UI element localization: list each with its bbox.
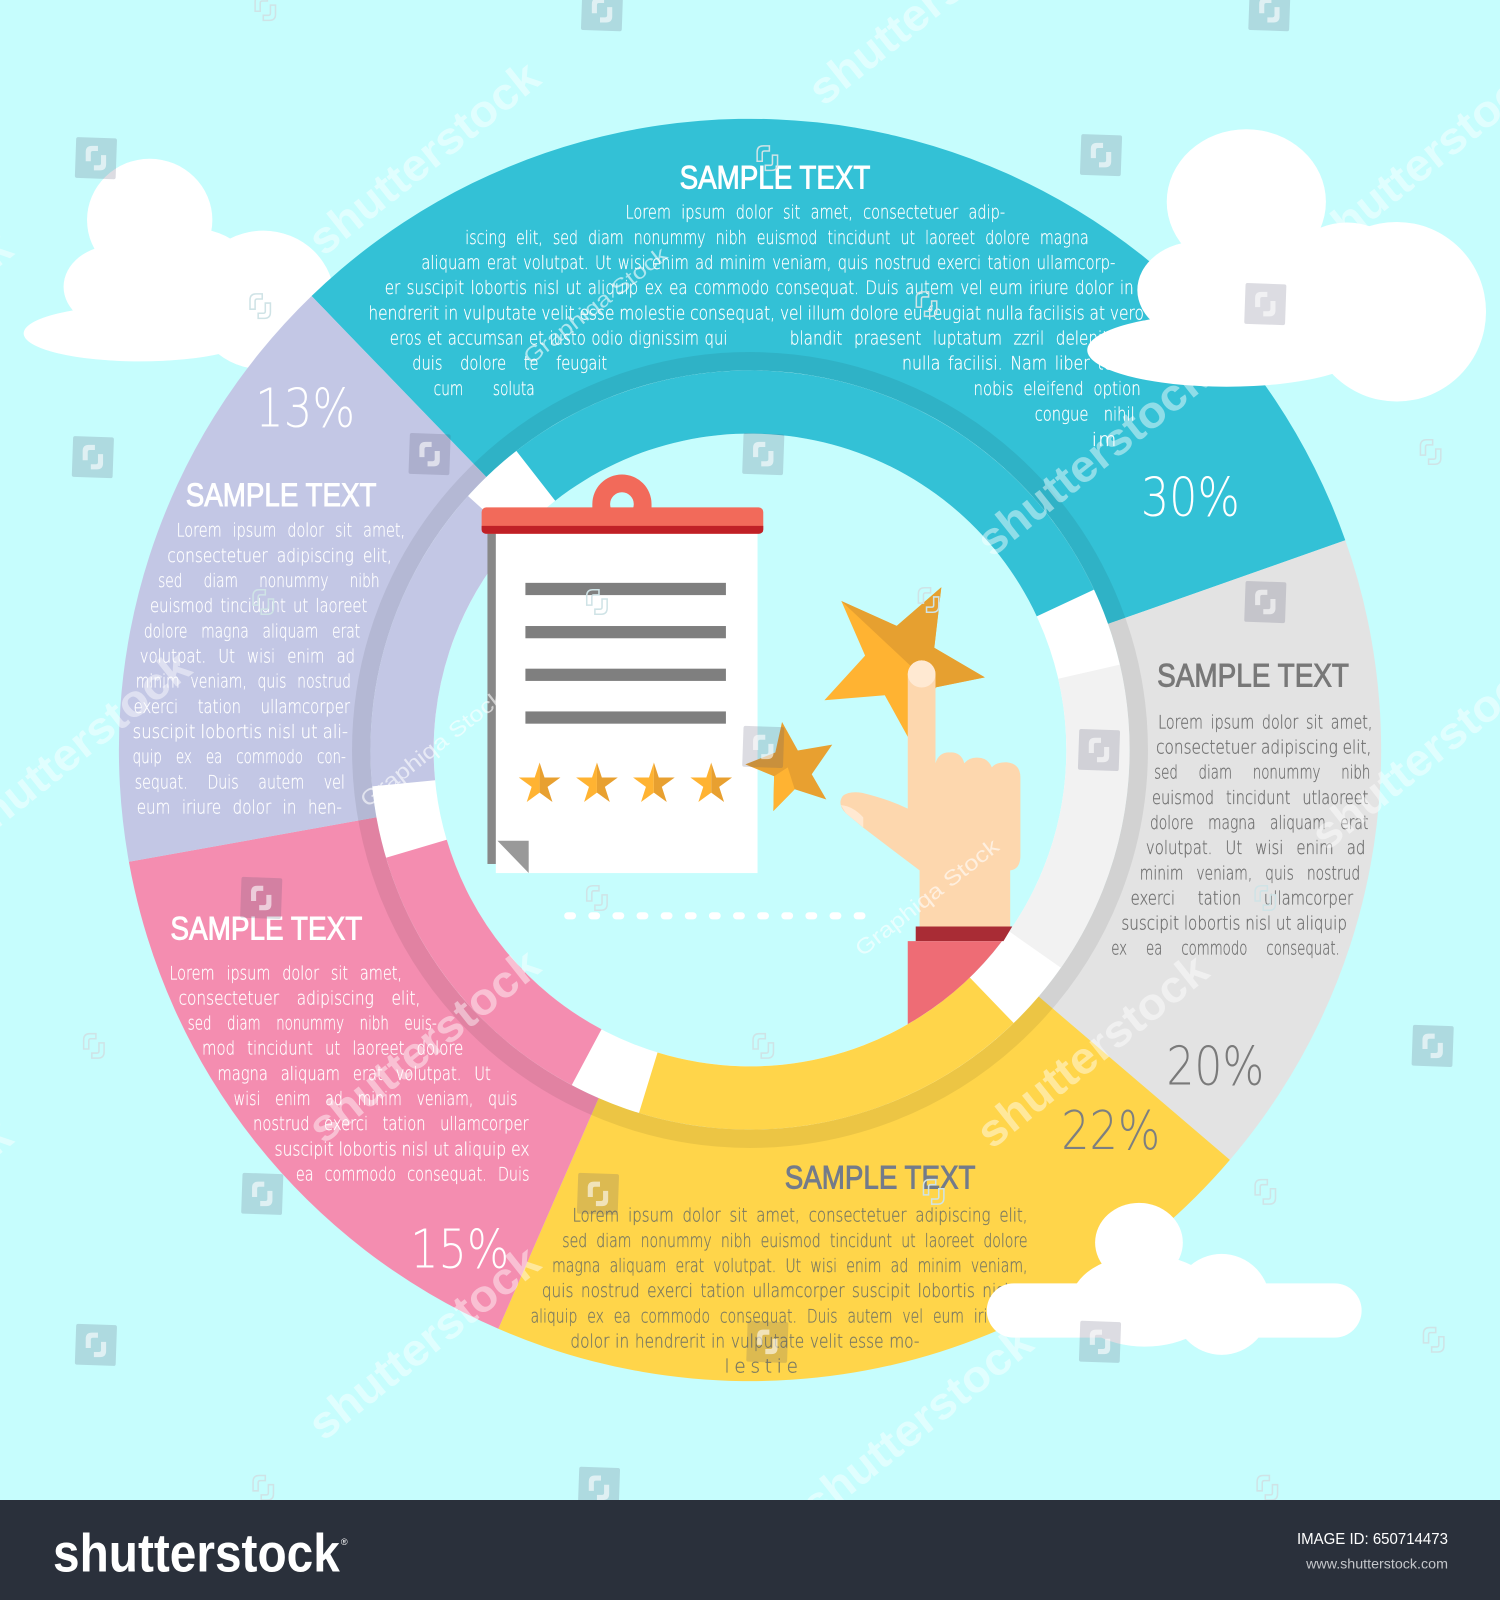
body: blandit praesent luptatum zzril delenit [790, 328, 1108, 349]
body: quis nostrud exerci tation ullamcorper suscipit lobortis nisl ut [542, 1281, 1032, 1302]
clip bar shadow [482, 526, 763, 534]
clip bar [482, 507, 763, 534]
thumbnail [841, 805, 863, 828]
watermark: shutterstock diagonals: shutterstock [298, 938, 549, 1153]
segment: purple inner [370, 496, 515, 786]
body: Lorem ipsum dolor sit amet, [169, 963, 402, 984]
body: consectetuer adipiscing elit, [167, 546, 392, 567]
heading: SAMPLE TEXT [1157, 657, 1349, 694]
segment: gray outer [1039, 540, 1381, 1160]
body: ea commodo consequat. Duis [296, 1165, 530, 1186]
body: cum soluta [434, 379, 535, 400]
watermark: shutterstock diagonals: shutterstock [791, 1316, 1042, 1530]
dashed divider [568, 912, 863, 919]
body: magna aliquam erat volutpat. Ut wisi enim ad minim veniam, [552, 1256, 1028, 1277]
watermark: shutterstock diagonals: shutterstock [966, 943, 1218, 1158]
segment: blue outer [312, 119, 1345, 624]
percentage: 30% [1141, 466, 1240, 528]
body: nostrud exerci tation ullamcorper [253, 1114, 529, 1135]
body: im [1092, 430, 1116, 451]
donut ring [119, 119, 1381, 1381]
segment: pink inner [386, 840, 602, 1085]
body: sed diam nonummy nibh [158, 571, 380, 592]
body: suscipit lobortis nisl ut aliquip ex [274, 1139, 530, 1160]
cloud: top right [1087, 129, 1486, 402]
body: dolor in hendrerit in vulputate velit esse mo- [570, 1331, 919, 1352]
body: Lorem ipsum dolor sit amet, consectetuer adipiscing elit, [572, 1206, 1028, 1227]
hand [840, 660, 1020, 927]
body: suscipit lobortis nisl ut aliquip [1121, 914, 1347, 935]
body: duis dolore te feugait [412, 353, 607, 374]
watermark: Graphiqa Stock: Graphiqa Stock [519, 242, 672, 369]
body: lestie [724, 1356, 798, 1377]
cloud: bottom right [987, 1203, 1362, 1355]
body: volutpat. Ut wisi enim ad [1146, 838, 1365, 859]
body: magna aliquam erat volutpat. Ut [217, 1064, 491, 1085]
body [169, 963, 530, 1186]
body [1111, 712, 1372, 960]
footer bar [0, 1500, 1500, 1600]
fingernail [908, 660, 936, 688]
body: mod tincidunt ut laoreet dolore [202, 1039, 463, 1060]
paper side strip [487, 531, 496, 864]
watermark: Graphiqa Stock: Graphiqa Stock [851, 834, 1004, 961]
body: aliquip ex ea commodo consequat. Duis autem vel eum iriure [531, 1306, 1010, 1327]
translucent inner band [361, 361, 1139, 1139]
website: www.shutterstock.com [1305, 1556, 1448, 1572]
icon: document with rating stars [482, 474, 763, 873]
body: Lorem ipsum dolor sit amet, [1158, 712, 1372, 733]
body: sequat. Duis autem vel [135, 772, 345, 793]
body: exerci tation ullamcorper [1131, 888, 1353, 909]
body [133, 521, 405, 818]
body: congue nihil [1035, 404, 1135, 425]
panel text: purple [133, 378, 405, 818]
panel text: gray [1111, 657, 1372, 1098]
panel text: yellow [531, 1100, 1160, 1377]
body: dolore magna aliquam erat [1150, 813, 1368, 834]
body: hendrerit in vulputate velit esse molestie consequat, vel illum dolore eu feugiat nulla facilisis at vero [368, 303, 1144, 324]
clip knob [592, 474, 652, 516]
heading: SAMPLE TEXT [785, 1158, 976, 1195]
body: sed diam nonummy nibh euismod tincidunt ut laoreet dolore [562, 1231, 1028, 1252]
footer logo: shutterstock [53, 1523, 341, 1583]
body: aliquam erat volutpat. Ut wisi enim ad minim veniam, quis nostrud exerci tation ullamcorp- [421, 253, 1115, 274]
watermark: shutterstock diagonals: shutterstock [298, 50, 549, 265]
segment: blue inner [516, 370, 1094, 616]
panel text: pink [169, 909, 530, 1280]
percentage: 13% [255, 378, 355, 440]
heading: SAMPLE TEXT [186, 476, 377, 513]
cloud: top left [24, 159, 335, 369]
paper sheet [496, 531, 758, 873]
body: Lorem ipsum dolor sit amet, consectetuer adip- [626, 202, 1005, 223]
body: consectetuer adipiscing elit, [179, 988, 420, 1009]
corner fold [497, 841, 529, 873]
body: quip ex ea commodo con- [133, 747, 346, 768]
cuff [916, 927, 1012, 941]
percentage: 15% [410, 1218, 509, 1280]
watermark: Graphiqa Stock [356, 242, 1004, 961]
heading: SAMPLE TEXT [680, 158, 870, 195]
body: consectetuer adipiscing elit, [1156, 737, 1371, 758]
watermark: shutterstock diagonals: shutterstock [298, 1235, 549, 1450]
body: minim veniam, quis nostrud [1140, 863, 1360, 884]
body: wisi enim ad minim veniam, quis [234, 1089, 517, 1110]
body: exerci tation ullamcorper [134, 697, 350, 718]
body: minim veniam, quis nostrud [136, 672, 351, 693]
icon: large star [824, 587, 985, 737]
white connector gaps [402, 402, 1098, 1098]
body: volutpat. Ut wisi enim ad [140, 646, 355, 667]
watermark: Graphiqa Stock: Graphiqa Stock [356, 685, 509, 812]
body: euismod tincidunt ut laoreet [150, 596, 367, 617]
body: Lorem ipsum dolor sit amet, [177, 521, 405, 542]
heading: SAMPLE TEXT [170, 909, 362, 946]
body: dolore magna aliquam erat [144, 621, 360, 642]
watermark: shutterstock diagonals: shutterstock [966, 351, 1218, 566]
body: eros et accumsan et iusto odio dignissim qui [390, 328, 728, 349]
segment: purple outer [119, 296, 486, 862]
body [368, 202, 1144, 451]
body: nulla facilisi. Nam liber tem [902, 353, 1129, 374]
icon: pointing hand [840, 660, 1020, 1024]
body: er suscipit lobortis nisl ut aliquip ex ea commodo consequat. Duis autem vel eum iriure dolor in [385, 278, 1134, 299]
body: iscing elit, sed diam nonummy nibh euismod tincidunt ut laoreet dolore magna [465, 228, 1089, 249]
percentage: 20% [1166, 1036, 1264, 1098]
four rating stars [519, 762, 732, 802]
body: sed diam nonummy nibh euis- [188, 1014, 437, 1035]
body: sed diam nonummy nibh [1154, 763, 1370, 784]
segment: yellow inner [639, 978, 1014, 1130]
image id: IMAGE ID: 650714473 [1297, 1531, 1448, 1548]
body: ex ea commodo consequat. [1111, 939, 1340, 960]
text lines on paper [525, 583, 726, 724]
registered mark: ® [341, 1537, 348, 1547]
body [531, 1206, 1032, 1377]
panel text: blue [368, 158, 1240, 528]
sleeve [908, 941, 1002, 1024]
percentage: 22% [1061, 1100, 1160, 1162]
body: nobis eleifend option [973, 379, 1141, 400]
body: suscipit lobortis nisl ut ali- [133, 722, 348, 743]
segment: pink outer [129, 817, 599, 1329]
icon: small floating star [745, 722, 832, 811]
segment: yellow outer [498, 997, 1230, 1381]
body: euismod tincidunt utlaoreet [1152, 788, 1368, 809]
body: eum iriure dolor in hen- [137, 797, 342, 818]
segment: gray inner [1009, 665, 1130, 968]
